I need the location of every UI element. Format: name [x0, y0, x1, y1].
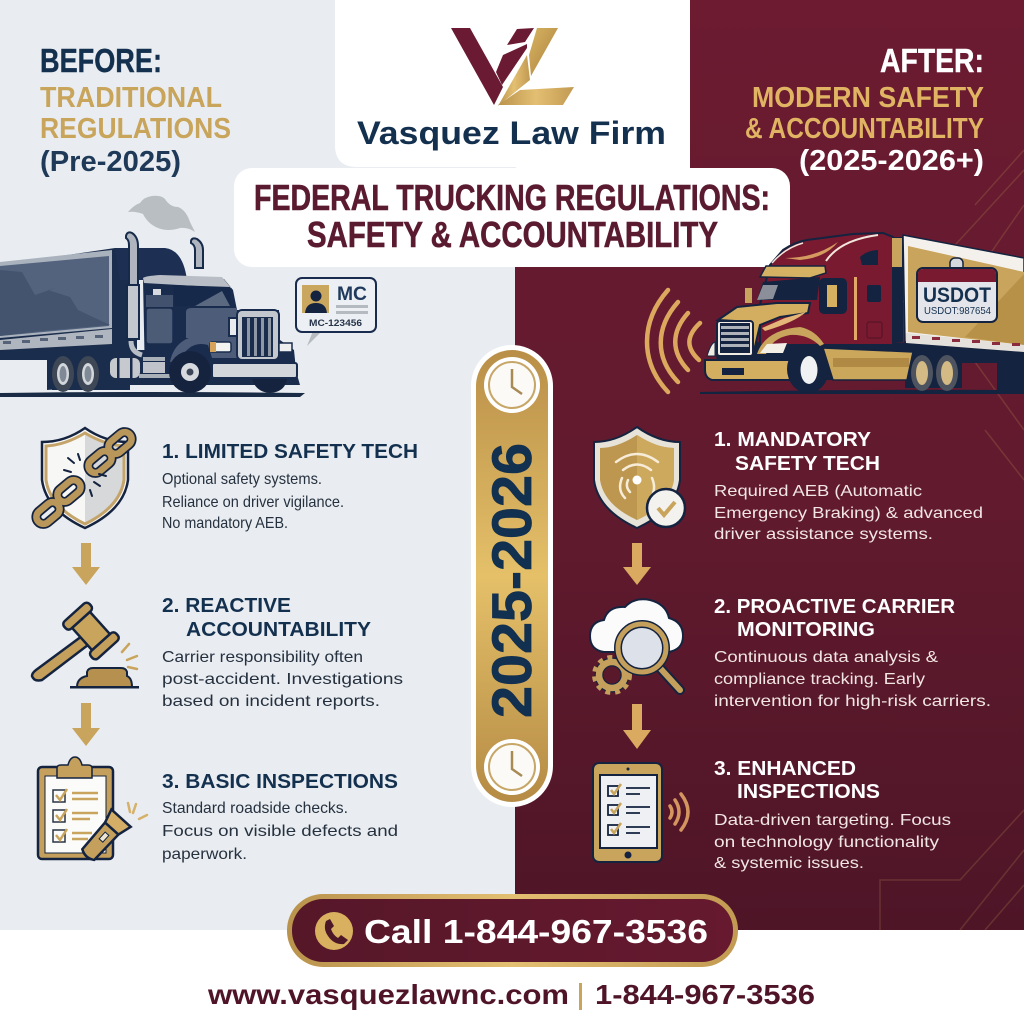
illustration: modern truck [700, 233, 1024, 394]
text: enhanced inspections [714, 758, 951, 872]
background: right maroon panel [515, 0, 1024, 930]
right item 1: mandatory safety tech [594, 427, 983, 543]
illustration: traditional truck [0, 196, 305, 397]
icon: shield with signal and check [594, 427, 685, 528]
text: mandatory safety tech: driver assistance systems. [714, 526, 933, 543]
text: limited safety tech: 1. LIMITED SAFETY TECH [162, 441, 418, 463]
heading: after: MODERN SAFETY [752, 82, 984, 114]
text: reactive accountability: 2. REACTIVE [162, 595, 291, 617]
windshield [757, 277, 820, 300]
icon: bottom clock [484, 739, 540, 795]
logo panel [335, 0, 690, 167]
MC number badge [296, 278, 376, 346]
heading: before [40, 42, 231, 178]
text: basic inspections: Standard roadside checks. [162, 800, 348, 817]
text: mandatory safety tech: Required AEB (Automatic [714, 483, 922, 500]
title card [234, 168, 790, 267]
text: proactive carrier monitoring: MONITORING [737, 619, 875, 641]
MC number badge: MC [337, 284, 367, 305]
heading: after: AFTER: [880, 42, 984, 79]
icon: clipboard with flashlight [38, 757, 147, 865]
title card: SAFETY & ACCOUNTABILITY [307, 214, 718, 255]
bumper [212, 363, 297, 378]
title card: FEDERAL TRUCKING REGULATIONS: [254, 177, 770, 218]
text: basic inspections: 3. BASIC INSPECTIONS [162, 771, 398, 793]
text: proactive carrier monitoring: Continuous data analysis & [714, 649, 938, 666]
cab [143, 279, 297, 380]
text: limited safety tech: Optional safety systems. [162, 471, 322, 488]
right item 2: proactive carrier monitoring [590, 596, 991, 710]
decorative gold lines on maroon panel [880, 150, 1024, 930]
heading: after: (2025-2026+) [799, 145, 984, 177]
trailer [903, 235, 1024, 352]
text: proactive carrier monitoring [714, 596, 991, 710]
fuel tank and step [110, 358, 140, 378]
text: basic inspections: paperwork. [162, 846, 247, 863]
icon: gavel [32, 601, 139, 688]
wheels [787, 345, 958, 393]
text: enhanced inspections: 3. ENHANCED [714, 758, 856, 780]
timeline pill [471, 345, 553, 807]
heading: after [745, 42, 984, 177]
firm name: Vasquez Law Firm [357, 115, 666, 151]
call to action button [287, 894, 738, 967]
rear wheels [52, 356, 99, 392]
text: reactive accountability: ACCOUNTABILITY [186, 619, 372, 641]
arrow: right 1 to 2 [623, 543, 651, 585]
USDOT placard: USDOT [923, 284, 991, 307]
heading: before: (Pre-2025) [40, 146, 181, 178]
logo mark: VL monogram [451, 28, 574, 106]
arrow: left 2 to 3 [72, 703, 100, 746]
text: proactive carrier monitoring: intervention for high-risk carriers. [714, 693, 991, 710]
icon: shield with broken chain [34, 428, 134, 528]
arrow: left 1 to 2 [72, 543, 100, 585]
icon: tablet checklist [593, 763, 688, 862]
left item 3: basic inspections [38, 757, 398, 865]
heading: after: & ACCOUNTABILITY [745, 113, 984, 145]
heading: before: BEFORE: [40, 42, 162, 79]
right item 3: enhanced inspections [593, 758, 951, 872]
arrow: right 2 to 3 [623, 704, 651, 749]
text: enhanced inspections: INSPECTIONS [737, 781, 880, 803]
text: basic inspections: Focus on visible defects and [162, 823, 398, 840]
hood [718, 303, 810, 355]
text: reactive accountability: post-accident. Investigations [162, 671, 403, 688]
chassis and trailer underside [716, 342, 1024, 390]
text: enhanced inspections: on technology functionality [714, 834, 939, 851]
text: mandatory safety tech: 1. MANDATORY [714, 429, 872, 451]
bumper and skirt [705, 360, 792, 380]
phone number: Call 1-844-967-3536 [364, 913, 708, 950]
USDOT placard: USDOT:987654 [924, 305, 991, 317]
text: reactive accountability [162, 595, 403, 710]
text: reactive accountability: Carrier responsibility often [162, 649, 363, 666]
front wheels [169, 351, 211, 393]
footer contact line [207, 979, 815, 1010]
icon: radar waves [647, 290, 700, 392]
icon: cloud, magnifier and gear [590, 599, 683, 693]
timeline years: 2025-2026 [480, 443, 543, 718]
USDOT placard [917, 258, 997, 322]
icon: top clock [484, 357, 540, 413]
left item 1: limited safety tech [34, 428, 418, 532]
cab body [760, 233, 893, 345]
cab door window [819, 278, 847, 314]
text: mandatory safety tech [714, 429, 983, 543]
heading: before: REGULATIONS [40, 113, 231, 145]
text: enhanced inspections: & systemic issues. [714, 855, 864, 872]
footer contact line: 1-844-967-3536 [595, 979, 815, 1010]
text: basic inspections [162, 771, 398, 863]
text: proactive carrier monitoring: compliance tracking. Early [714, 671, 925, 688]
text: mandatory safety tech: SAFETY TECH [735, 453, 880, 475]
exhaust smoke [128, 196, 195, 232]
text: mandatory safety tech: Emergency Braking) & advanced [714, 505, 983, 522]
heading: before: TRADITIONAL [40, 82, 222, 114]
text: proactive carrier monitoring: 2. PROACTIVE CARRIER [714, 596, 956, 618]
text: limited safety tech: Reliance on driver vigilance. [162, 494, 344, 511]
background: left light panel [0, 0, 516, 930]
text: limited safety tech: No mandatory AEB. [162, 515, 288, 532]
text: enhanced inspections: Data-driven targeting. Focus [714, 812, 951, 829]
footer contact line: www.vasquezlawnc.com [207, 979, 569, 1010]
icon: phone [315, 912, 353, 950]
MC number badge: MC-123456 [309, 318, 362, 329]
text: limited safety tech [162, 441, 418, 532]
exhaust stacks [126, 232, 138, 285]
left item 2: reactive accountability [32, 595, 403, 710]
text: reactive accountability: based on incident reports. [162, 693, 380, 710]
